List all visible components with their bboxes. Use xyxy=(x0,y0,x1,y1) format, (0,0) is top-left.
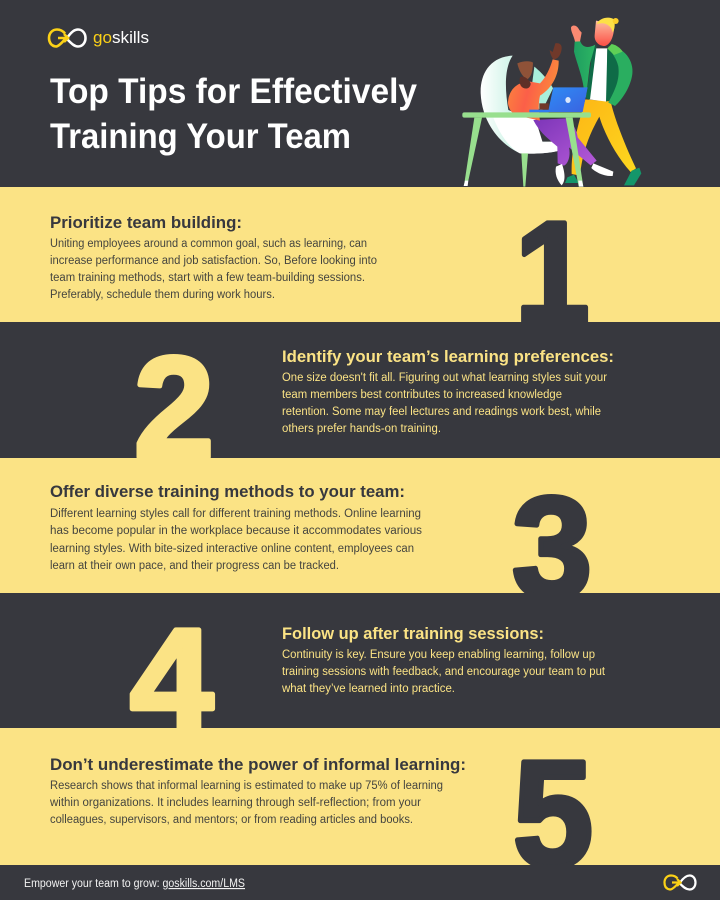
number 4: 4 xyxy=(130,600,213,760)
body text: team training methods, start with a few team-building sessions. xyxy=(50,272,365,284)
man's left shoe xyxy=(565,175,579,183)
body text: has become popular in the workplace because it accommodates various xyxy=(50,525,422,537)
body text: learning styles. With bite-sized interactive online content, employees can xyxy=(50,543,414,555)
man's jacket sleeve xyxy=(608,47,633,106)
man's hair bun xyxy=(613,18,619,24)
body text: One size doesn't fit all. Figuring out what learning styles suit your xyxy=(282,372,607,384)
man's face xyxy=(595,21,614,46)
body text xyxy=(49,780,443,826)
woman's legs xyxy=(533,118,597,166)
man's trousers xyxy=(572,99,636,176)
man's shirt xyxy=(589,48,607,102)
chair leg xyxy=(521,153,528,187)
body text xyxy=(282,372,607,435)
woman's forearm xyxy=(539,103,549,110)
body text: colleagues, supervisors, and mentors; or from reading articles and books. xyxy=(50,814,413,826)
body text: training sessions with feedback, and encourage your team to put xyxy=(282,666,606,678)
panel: tip 4 xyxy=(130,627,605,728)
jacket inner shade xyxy=(606,48,619,102)
body text: learn at their own pace, and their progress can be tracked. xyxy=(50,560,339,572)
footer call to action: Empower your team to grow: goskills.com/LMS xyxy=(24,878,245,890)
band xyxy=(0,593,720,728)
body text: Different learning styles call for different training methods. Online learning xyxy=(50,508,421,520)
body text: Preferably, schedule them during work hours. xyxy=(50,289,275,301)
man's raised hand xyxy=(571,25,582,42)
band xyxy=(0,322,720,458)
table right leg xyxy=(566,118,583,187)
table top xyxy=(462,112,591,118)
title xyxy=(50,72,418,156)
number 3: 3 xyxy=(512,467,592,628)
body text xyxy=(281,649,606,695)
number 5: 5 xyxy=(513,730,593,899)
title line 1: Top Tips for Effectively xyxy=(50,72,418,111)
header panel xyxy=(49,18,641,187)
body text xyxy=(50,508,422,572)
man's jacket left xyxy=(574,41,595,97)
chair back xyxy=(481,56,560,154)
footer logo xyxy=(664,876,696,890)
woman's raised hand xyxy=(550,43,562,59)
logo wordmark: goskills xyxy=(93,28,149,47)
chair side xyxy=(530,67,553,112)
table left leg xyxy=(464,118,482,186)
number 2: 2 xyxy=(134,327,214,488)
footer band xyxy=(0,865,720,900)
table foot caps xyxy=(464,181,583,187)
band xyxy=(0,728,720,865)
panel: tip 3 xyxy=(0,458,720,593)
body text: within organizations. It includes learning through self-reflection; from your xyxy=(49,797,421,809)
band xyxy=(0,187,720,322)
body text: retention. Some may feel lectures and readings work best, while xyxy=(282,406,601,418)
panel: tip 1 xyxy=(0,187,720,322)
heading: Identify your team’s learning preferences: xyxy=(282,347,614,366)
jacket collar xyxy=(607,44,623,55)
title line 2: Training Your Team xyxy=(50,117,351,156)
woman's hair xyxy=(520,77,531,89)
footer xyxy=(0,865,720,900)
heading: Follow up after training sessions: xyxy=(282,624,544,643)
woman's torso and arm xyxy=(508,59,559,121)
body text: Uniting employees around a common goal, such as learning, can xyxy=(50,238,367,250)
woman's head xyxy=(517,61,533,79)
logo mark xyxy=(49,30,86,46)
heading: Don’t underestimate the power of informal learning: xyxy=(50,755,466,774)
chair seat xyxy=(493,118,560,154)
laptop screen xyxy=(548,87,588,112)
number 1: 1 xyxy=(515,193,589,353)
man's right shoe xyxy=(624,168,641,185)
logo xyxy=(49,28,149,47)
panel: tip 2 xyxy=(136,350,612,458)
panel: tip 5 xyxy=(0,728,720,865)
man's hair xyxy=(597,18,615,33)
heading: Prioritize team building: xyxy=(50,213,242,232)
man's jacket inner left xyxy=(586,45,597,99)
body text xyxy=(50,238,377,301)
body text: Research shows that informal learning is estimated to make up 75% of learning xyxy=(50,780,443,792)
band xyxy=(0,458,720,593)
laptop logo xyxy=(565,97,571,103)
body text: team members best contributes to increased knowledge xyxy=(282,389,562,401)
body text: what they’ve learned into practice. xyxy=(281,683,455,695)
body text: Continuity is key. Ensure you keep enabling learning, follow up xyxy=(282,649,595,661)
woman's shoes xyxy=(556,163,613,185)
laptop base xyxy=(529,110,549,112)
heading: Offer diverse training methods to your team: xyxy=(50,482,405,501)
body text: increase performance and job satisfaction. So, Before looking into xyxy=(50,255,377,267)
illustration: two colleagues high-fiving at a desk xyxy=(462,18,641,187)
body text: others prefer hands-on training. xyxy=(282,423,441,435)
